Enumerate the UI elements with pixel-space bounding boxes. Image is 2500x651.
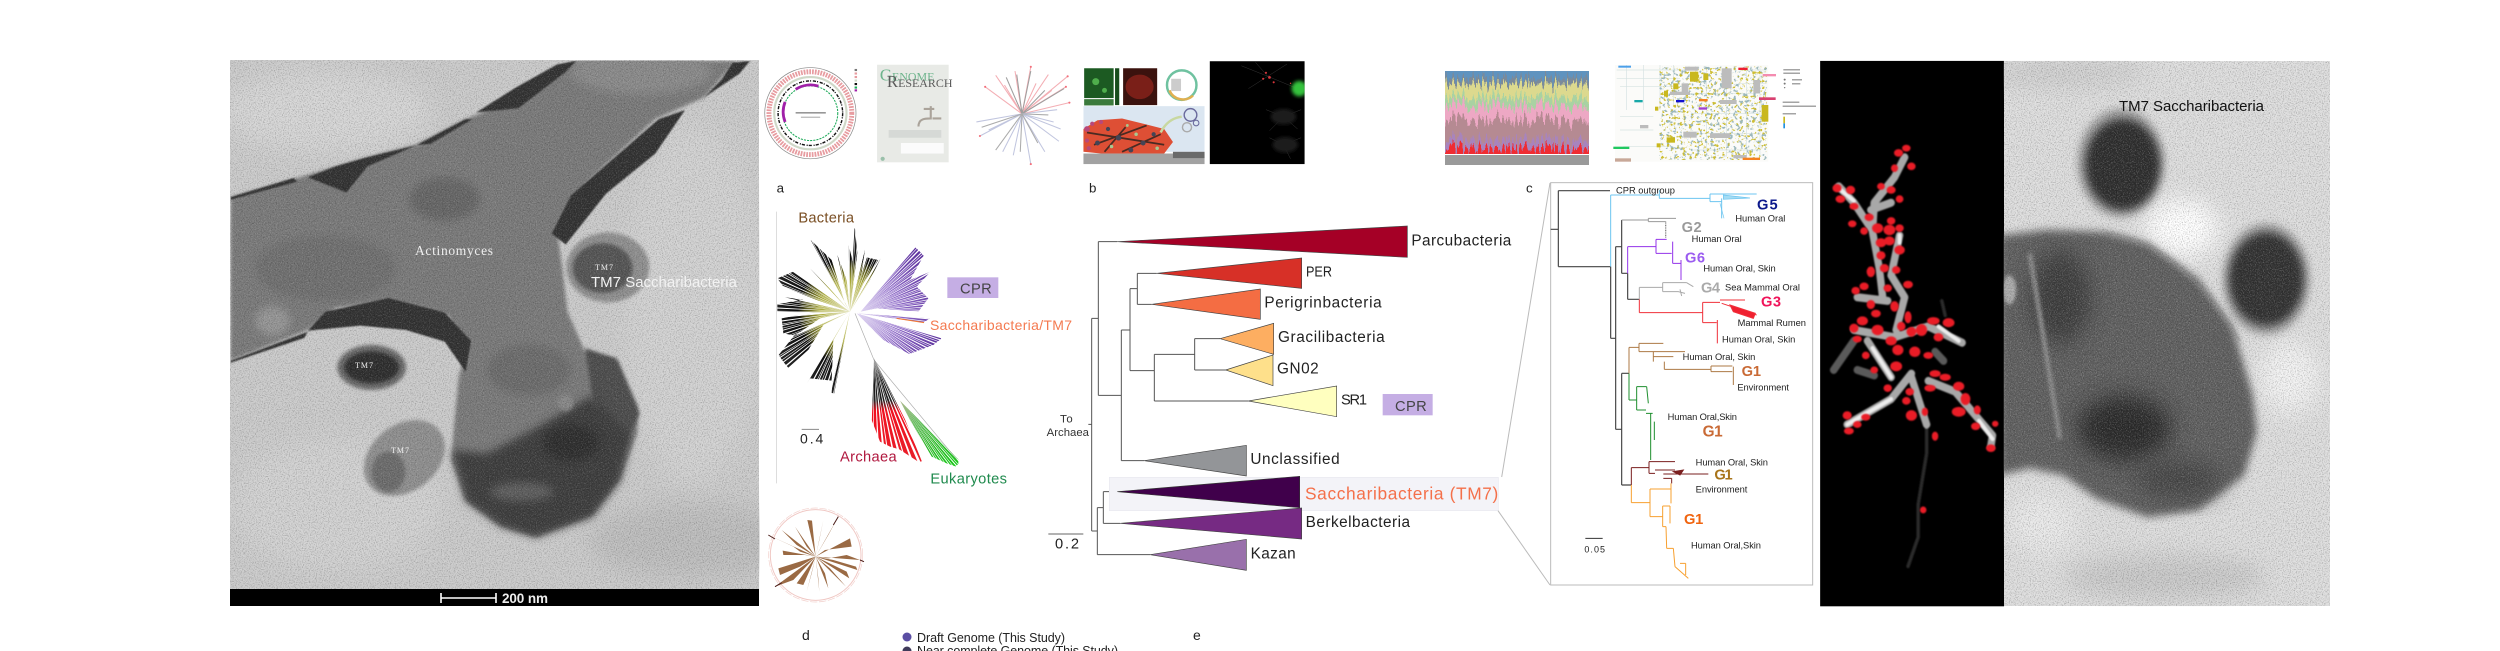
red labelled TM7 cells [1833, 146, 1998, 512]
clade: Saccharibacteria (TM7) [1117, 476, 1498, 508]
tree: G6 purple [1628, 239, 1681, 280]
tree: G1 orange [1631, 483, 1688, 578]
label: TM7 Saccharibacteria: TM7 Saccharibacteria [2119, 98, 2265, 115]
thumbnail: Genome Research cover: RESEARCH [887, 72, 953, 91]
legend: genome types [902, 631, 1118, 651]
branch: Saccharibacteria/TM7 [897, 318, 924, 323]
scale: 0.2 [1048, 534, 1083, 552]
clade: GN02 [1226, 355, 1319, 386]
clade: PER: PER [1306, 265, 1332, 281]
filaments [1834, 157, 1993, 566]
label: e: e [1193, 627, 1201, 643]
panel c: Saccharibacteria subtree [1551, 183, 1813, 585]
clade: Perigrinbacteria: Perigrinbacteria [1264, 295, 1382, 312]
tree: bacteria fan [777, 228, 880, 394]
tree labels: G1 [1742, 364, 1761, 380]
tree labels: G4 [1701, 281, 1721, 297]
thumbnail: network on black [1210, 61, 1307, 164]
tree labels: Human Oral, Skin [1703, 264, 1776, 274]
tree labels: Human Oral, Skin [1696, 457, 1768, 467]
label: c: c [1526, 181, 1533, 196]
clade: SR1 [1248, 386, 1367, 417]
tree labels: G2 [1682, 220, 1702, 236]
panel: fluorescence micrograph [1820, 61, 2004, 606]
tree labels: Human Oral, Skin [1722, 335, 1795, 345]
thumbnail: metabolic map [1613, 65, 1816, 162]
clade: GN02: GN02 [1277, 360, 1319, 377]
highlight band: Saccharibacteria [1109, 477, 1498, 511]
clade: PER [1157, 258, 1332, 288]
tree labels: Human Oral, Skin [1683, 352, 1755, 362]
thumbnail strip: publications [765, 61, 1307, 165]
tree labels: G6 [1685, 250, 1705, 266]
tree: CPR fan [857, 242, 942, 354]
tree labels: Human Oral [1692, 234, 1742, 244]
label: TM7 Saccharibacteria: TM7 Saccharibacteria [591, 274, 738, 291]
label: CPR: CPR [960, 281, 992, 297]
scale: 0.05 [1584, 538, 1605, 554]
tree labels: G1 [1684, 512, 1703, 528]
tree: eukaryote fan [900, 401, 958, 467]
tree: G1 dark red [1631, 462, 1708, 485]
label: Actinomyces: Actinomyces [415, 243, 493, 258]
zoom connector lines [1498, 183, 1550, 585]
tree labels [1616, 185, 1806, 550]
clade: Kazan [1150, 539, 1296, 570]
thumbnail: circular genome map [765, 68, 857, 159]
label: To Archaea: To [1060, 413, 1073, 425]
label: Bacteria: Bacteria [798, 211, 855, 227]
thumbnail: Genome Research cover: GENOME [880, 66, 934, 85]
clade: Gracilibacteria: Gracilibacteria [1278, 329, 1385, 346]
clade: Unclassified: Unclassified [1250, 451, 1340, 468]
clade: Kazan: Kazan [1251, 545, 1296, 562]
tree: backbone [1551, 191, 1639, 485]
clade: Berkelbacteria [1120, 508, 1410, 539]
tree labels: Environment [1696, 485, 1748, 495]
label: b: b [1089, 181, 1096, 196]
panel a: tree of life [768, 181, 1072, 602]
tree: archaea fan [872, 358, 923, 465]
tree: G3 red [1639, 299, 1757, 343]
thumbnail: Genome Research cover [877, 65, 953, 162]
tree labels: CPR outgroup [1616, 185, 1675, 195]
tree branches [1088, 242, 1248, 555]
tree labels: G3 [1761, 295, 1781, 311]
label: To Archaea: Archaea [1047, 427, 1090, 439]
clade: Saccharibacteria (TM7): Saccharibacteria (TM7) [1305, 484, 1498, 504]
panel: TEM micrograph close-up [1986, 57, 2330, 606]
label: CPR [947, 277, 998, 298]
scale bar: 200 nm [230, 589, 759, 606]
tree labels: Sea Mammal Oral [1725, 283, 1800, 293]
panel b: CPR phylogeny [1047, 181, 1533, 570]
label: a: a [777, 181, 785, 196]
thumbnail: biofilm illustration [1082, 63, 1205, 164]
thumbnail: circular brown tree [768, 508, 864, 602]
tree labels: G1 [1714, 467, 1733, 483]
label: TM7 lower: TM7 [391, 446, 409, 455]
label: TM7 left: TM7 [355, 361, 373, 370]
label: TM7 upper: TM7 [595, 263, 613, 272]
clade: Parcubacteria [1117, 226, 1512, 257]
scale bar: 200 nm: 200 nm [502, 591, 548, 606]
tree: G4 grey [1639, 283, 1693, 299]
label: Eukaryotes: Eukaryotes [930, 471, 1007, 487]
thumbnail: radial tree [976, 66, 1070, 165]
legend: genome types: Draft Genome (This Study) [917, 631, 1065, 645]
tree: G1 brown [1629, 343, 1733, 385]
tree: G5 blue [1611, 190, 1757, 267]
tree: G2 grey [1622, 218, 1676, 222]
clade: Gracilibacteria [1220, 323, 1385, 354]
tree labels: Human Oral [1735, 213, 1785, 223]
clade: Parcubacteria: Parcubacteria [1411, 232, 1512, 249]
label: Archaea: Archaea [840, 450, 898, 466]
scale: 0.4: 0.4 [800, 430, 824, 446]
tree labels: Human Oral,Skin [1668, 412, 1737, 422]
scale: 0.2: 0.2 [1055, 536, 1079, 552]
tree labels: Mammal Rumen [1738, 318, 1806, 328]
tree labels: G1 [1703, 424, 1723, 441]
tree labels: Environment [1737, 383, 1789, 393]
label: Saccharibacteria/TM7: Saccharibacteria/TM7 [930, 317, 1072, 333]
clade: SR1: SR1 [1341, 392, 1367, 408]
scale: 0.05: 0.05 [1584, 544, 1605, 554]
label: d: d [802, 627, 810, 643]
tree: G1 green [1629, 373, 1654, 460]
clade: Perigrinbacteria [1152, 289, 1382, 319]
tree labels: Human Oral,Skin [1691, 540, 1761, 550]
clade: Unclassified [1144, 445, 1340, 476]
tree labels: G5 [1757, 197, 1778, 213]
label: CPR: CPR [1395, 399, 1427, 415]
panel: TEM micrograph of Actinomyces with TM7 [230, 60, 760, 606]
thumbnail: stacked abundance heatmap [1445, 71, 1589, 165]
label: CPR [1383, 394, 1433, 415]
label: To Archaea [1047, 413, 1090, 439]
clade: Berkelbacteria: Berkelbacteria [1306, 514, 1410, 531]
